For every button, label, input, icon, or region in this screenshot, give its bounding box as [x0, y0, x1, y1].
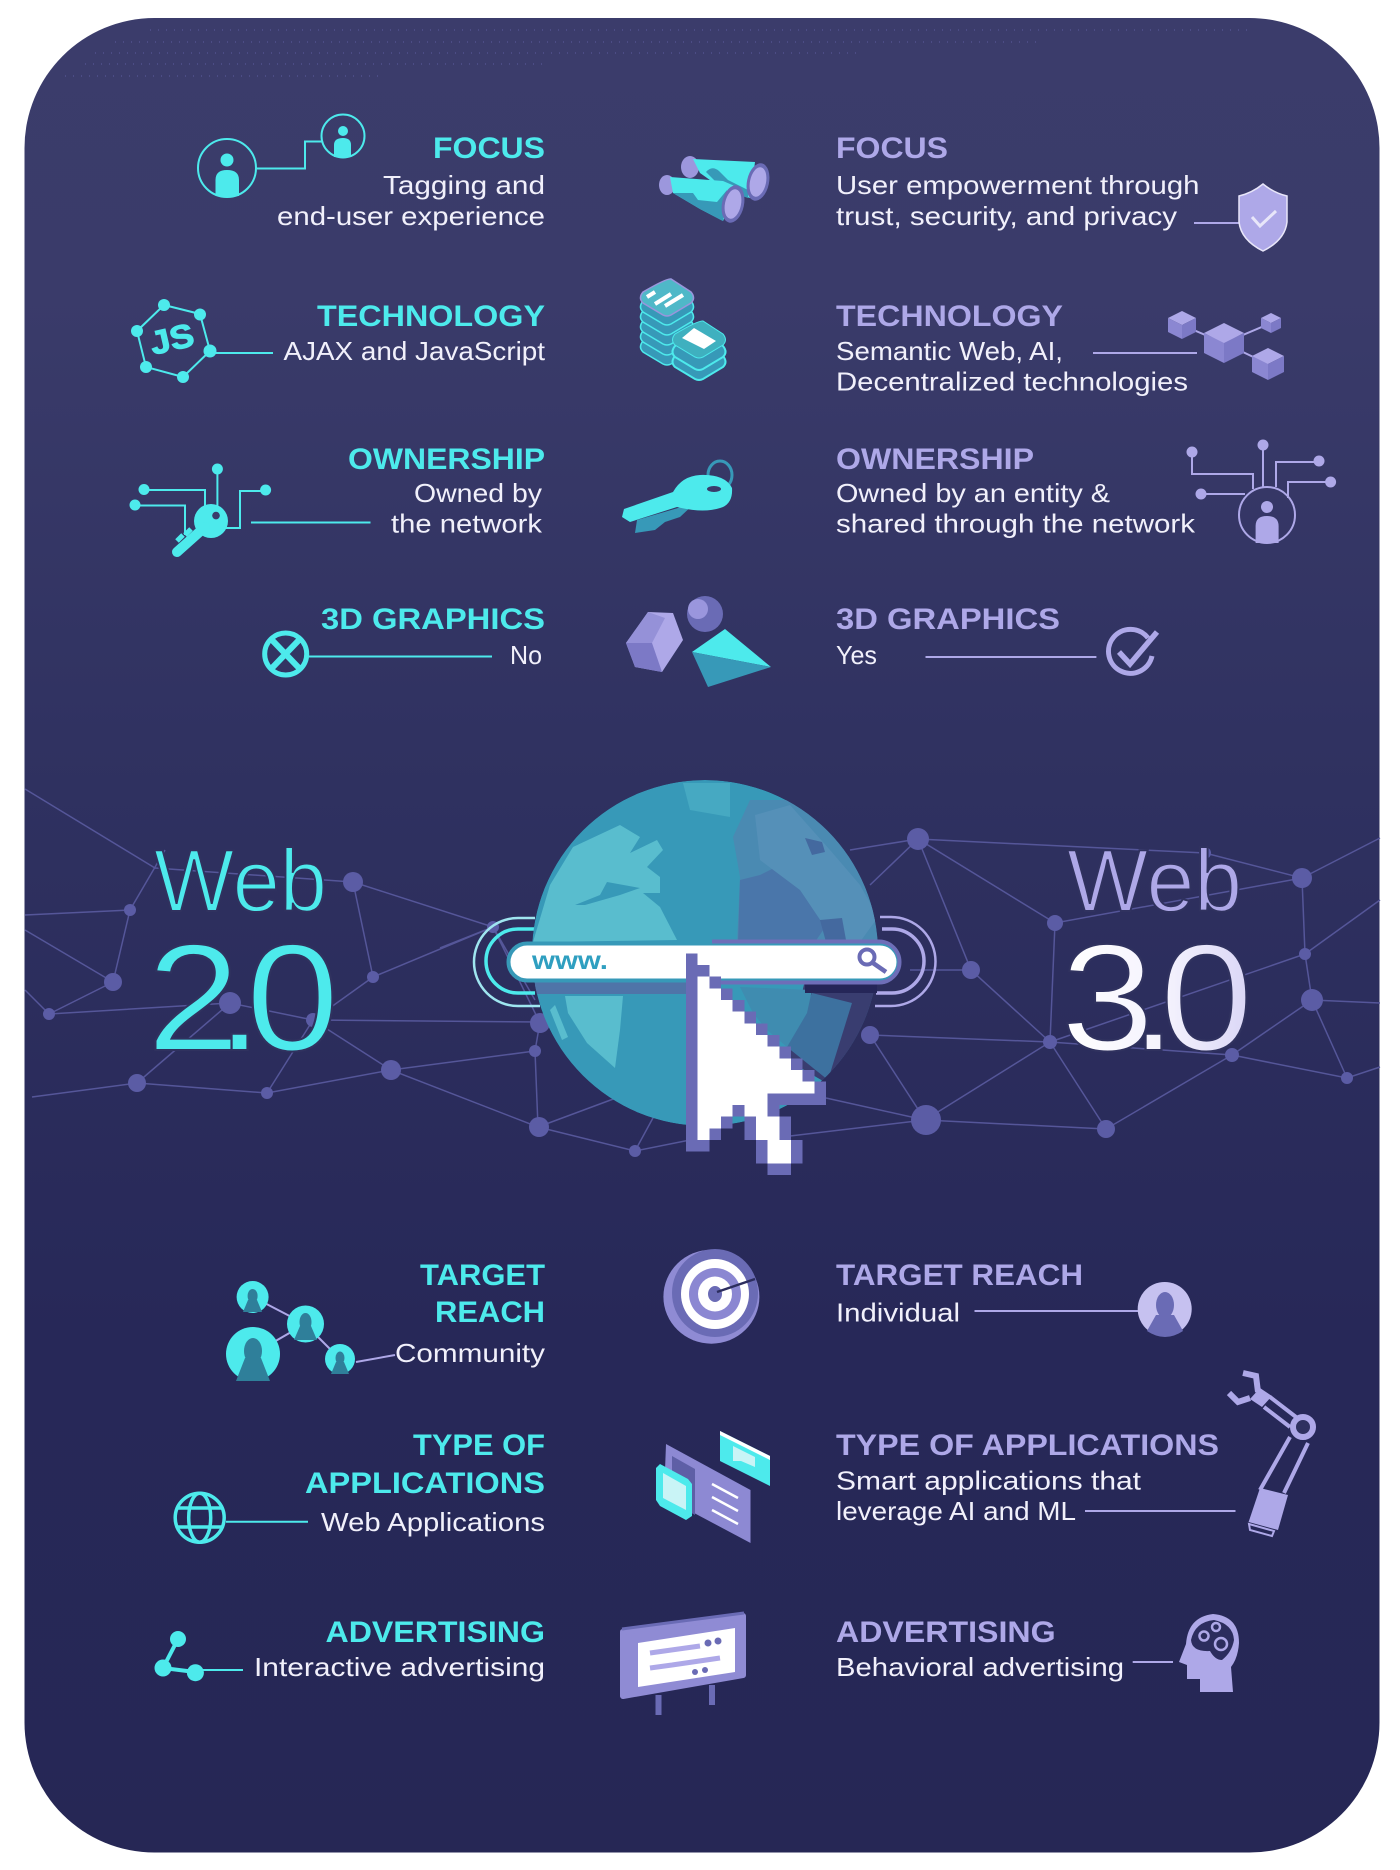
text block: Interactive advertising: [254, 1652, 545, 1682]
panel: Web 2.0 ownership: [130, 443, 545, 552]
network mesh background: [25, 789, 1380, 1157]
icon: check circle: [926, 629, 1157, 673]
panel: Web 2.0 advertising: [154, 1616, 545, 1682]
panel: Web 2.0 type of applications: [175, 1429, 545, 1542]
text block: Decentralized technologies: [836, 366, 1188, 396]
heading: [420, 1259, 545, 1329]
search bar: [508, 944, 898, 980]
dark band under search bar: [805, 981, 877, 993]
icon: community: [226, 1281, 395, 1381]
text block: the network: [391, 508, 543, 538]
text block: [277, 170, 545, 231]
text block: Tagging and: [383, 170, 545, 200]
heading: 3D GRAPHICS: [321, 603, 545, 636]
www text: www.: [531, 945, 608, 975]
icon: shield: [1194, 184, 1287, 251]
icon: keys: [622, 461, 732, 533]
text block: [391, 478, 543, 538]
heading: FOCUS: [433, 132, 545, 165]
text block: shared through the network: [836, 508, 1196, 538]
panel: Web 3.0 technology: [836, 300, 1284, 396]
heading: [305, 1429, 545, 1500]
title: Web 3.0: Web: [1067, 831, 1242, 930]
panel: Web 3.0 target reach: [836, 1259, 1192, 1337]
icon: key circuit: [130, 464, 370, 552]
heading: OWNERSHIP: [836, 443, 1034, 476]
heading: TYPE OF: [413, 1429, 545, 1462]
icon: JavaScript hexagon: [131, 299, 273, 383]
ring arcs behind search bar: [474, 917, 936, 1006]
icon: JavaScript hexagon: JS: [146, 316, 197, 362]
title: Web 2.0: 2.0: [147, 912, 339, 1082]
icon: wireframe globe: [175, 1493, 308, 1542]
text block: Community: [395, 1338, 545, 1368]
icon: 3D shapes: [626, 596, 771, 687]
icon: target: [663, 1249, 759, 1344]
central globe with search bar and cursor: [474, 780, 936, 1175]
icon: individual: [974, 1282, 1192, 1337]
text block: Semantic Web, AI,: [836, 336, 1063, 366]
icon: database stacks: [640, 279, 726, 380]
text block: Individual: [836, 1298, 960, 1328]
heading: TECHNOLOGY: [317, 300, 545, 333]
panel: Web 3.0 advertising: [836, 1614, 1239, 1692]
text block: Owned by an entity &: [836, 478, 1110, 508]
panel: Web 3.0 ownership: [836, 440, 1336, 543]
icon: binoculars: [659, 156, 773, 225]
heading: ADVERTISING: [836, 1616, 1056, 1649]
icon: pixel cursor: [686, 953, 826, 1175]
heading: TECHNOLOGY: [836, 300, 1063, 333]
panel: Web 2.0 3D graphics: [265, 603, 545, 675]
text block: Owned by: [414, 478, 542, 508]
panel: Web 2.0 technology: [131, 299, 546, 383]
icon: magnifier: [860, 950, 886, 972]
panel: Web 3.0 focus: [836, 132, 1287, 251]
heading: 3D GRAPHICS: [836, 603, 1060, 636]
text block: Yes: [836, 640, 877, 670]
panel: Web 3.0 type of applications: [836, 1373, 1313, 1536]
text block: trust, security, and privacy: [836, 201, 1177, 231]
text block: User empowerment through: [836, 170, 1200, 200]
heading: ADVERTISING: [326, 1616, 545, 1649]
panel: Web 3.0 3D graphics: [836, 603, 1157, 673]
title: Web 3.0: [1061, 831, 1253, 1082]
text block: end-user experience: [277, 201, 545, 231]
heading: OWNERSHIP: [348, 443, 545, 476]
text block: Behavioral advertising: [836, 1652, 1124, 1682]
title: Web 3.0: 3.0: [1061, 912, 1253, 1082]
text block: No: [510, 640, 542, 670]
text block: leverage AI and ML: [836, 1496, 1076, 1526]
icon: head with gears: [1133, 1614, 1239, 1692]
dotted texture at the top of the card: [65, 30, 1250, 76]
icon: share nodes: [154, 1631, 243, 1681]
icon: robot arm: [1085, 1373, 1313, 1536]
text block: Smart applications that: [836, 1466, 1142, 1496]
panel: Web 2.0 focus: [198, 114, 545, 231]
text block: [836, 170, 1200, 231]
icon: cube network: [1093, 311, 1284, 380]
icon: application windows: [656, 1431, 770, 1543]
heading: APPLICATIONS: [305, 1467, 545, 1500]
icon: billboard: [622, 1613, 744, 1715]
text block: [836, 336, 1188, 396]
icon: connected users: [198, 114, 364, 197]
heading: TARGET: [420, 1259, 545, 1292]
icon: cross circle: [265, 633, 492, 675]
globe: [532, 780, 900, 1126]
heading: FOCUS: [836, 132, 948, 165]
panel: Web 2.0 target reach: [226, 1259, 545, 1381]
heading: REACH: [435, 1296, 545, 1329]
icon: user circuit: [1186, 440, 1336, 543]
heading: TARGET REACH: [836, 1259, 1083, 1292]
text block: [836, 478, 1196, 538]
text block: [836, 1466, 1142, 1526]
text block: Web Applications: [321, 1507, 545, 1537]
title: Web 2.0: Web: [154, 831, 327, 930]
heading: TYPE OF APPLICATIONS: [836, 1429, 1219, 1462]
title: Web 2.0: [147, 831, 339, 1082]
text block: AJAX and JavaScript: [284, 336, 546, 366]
